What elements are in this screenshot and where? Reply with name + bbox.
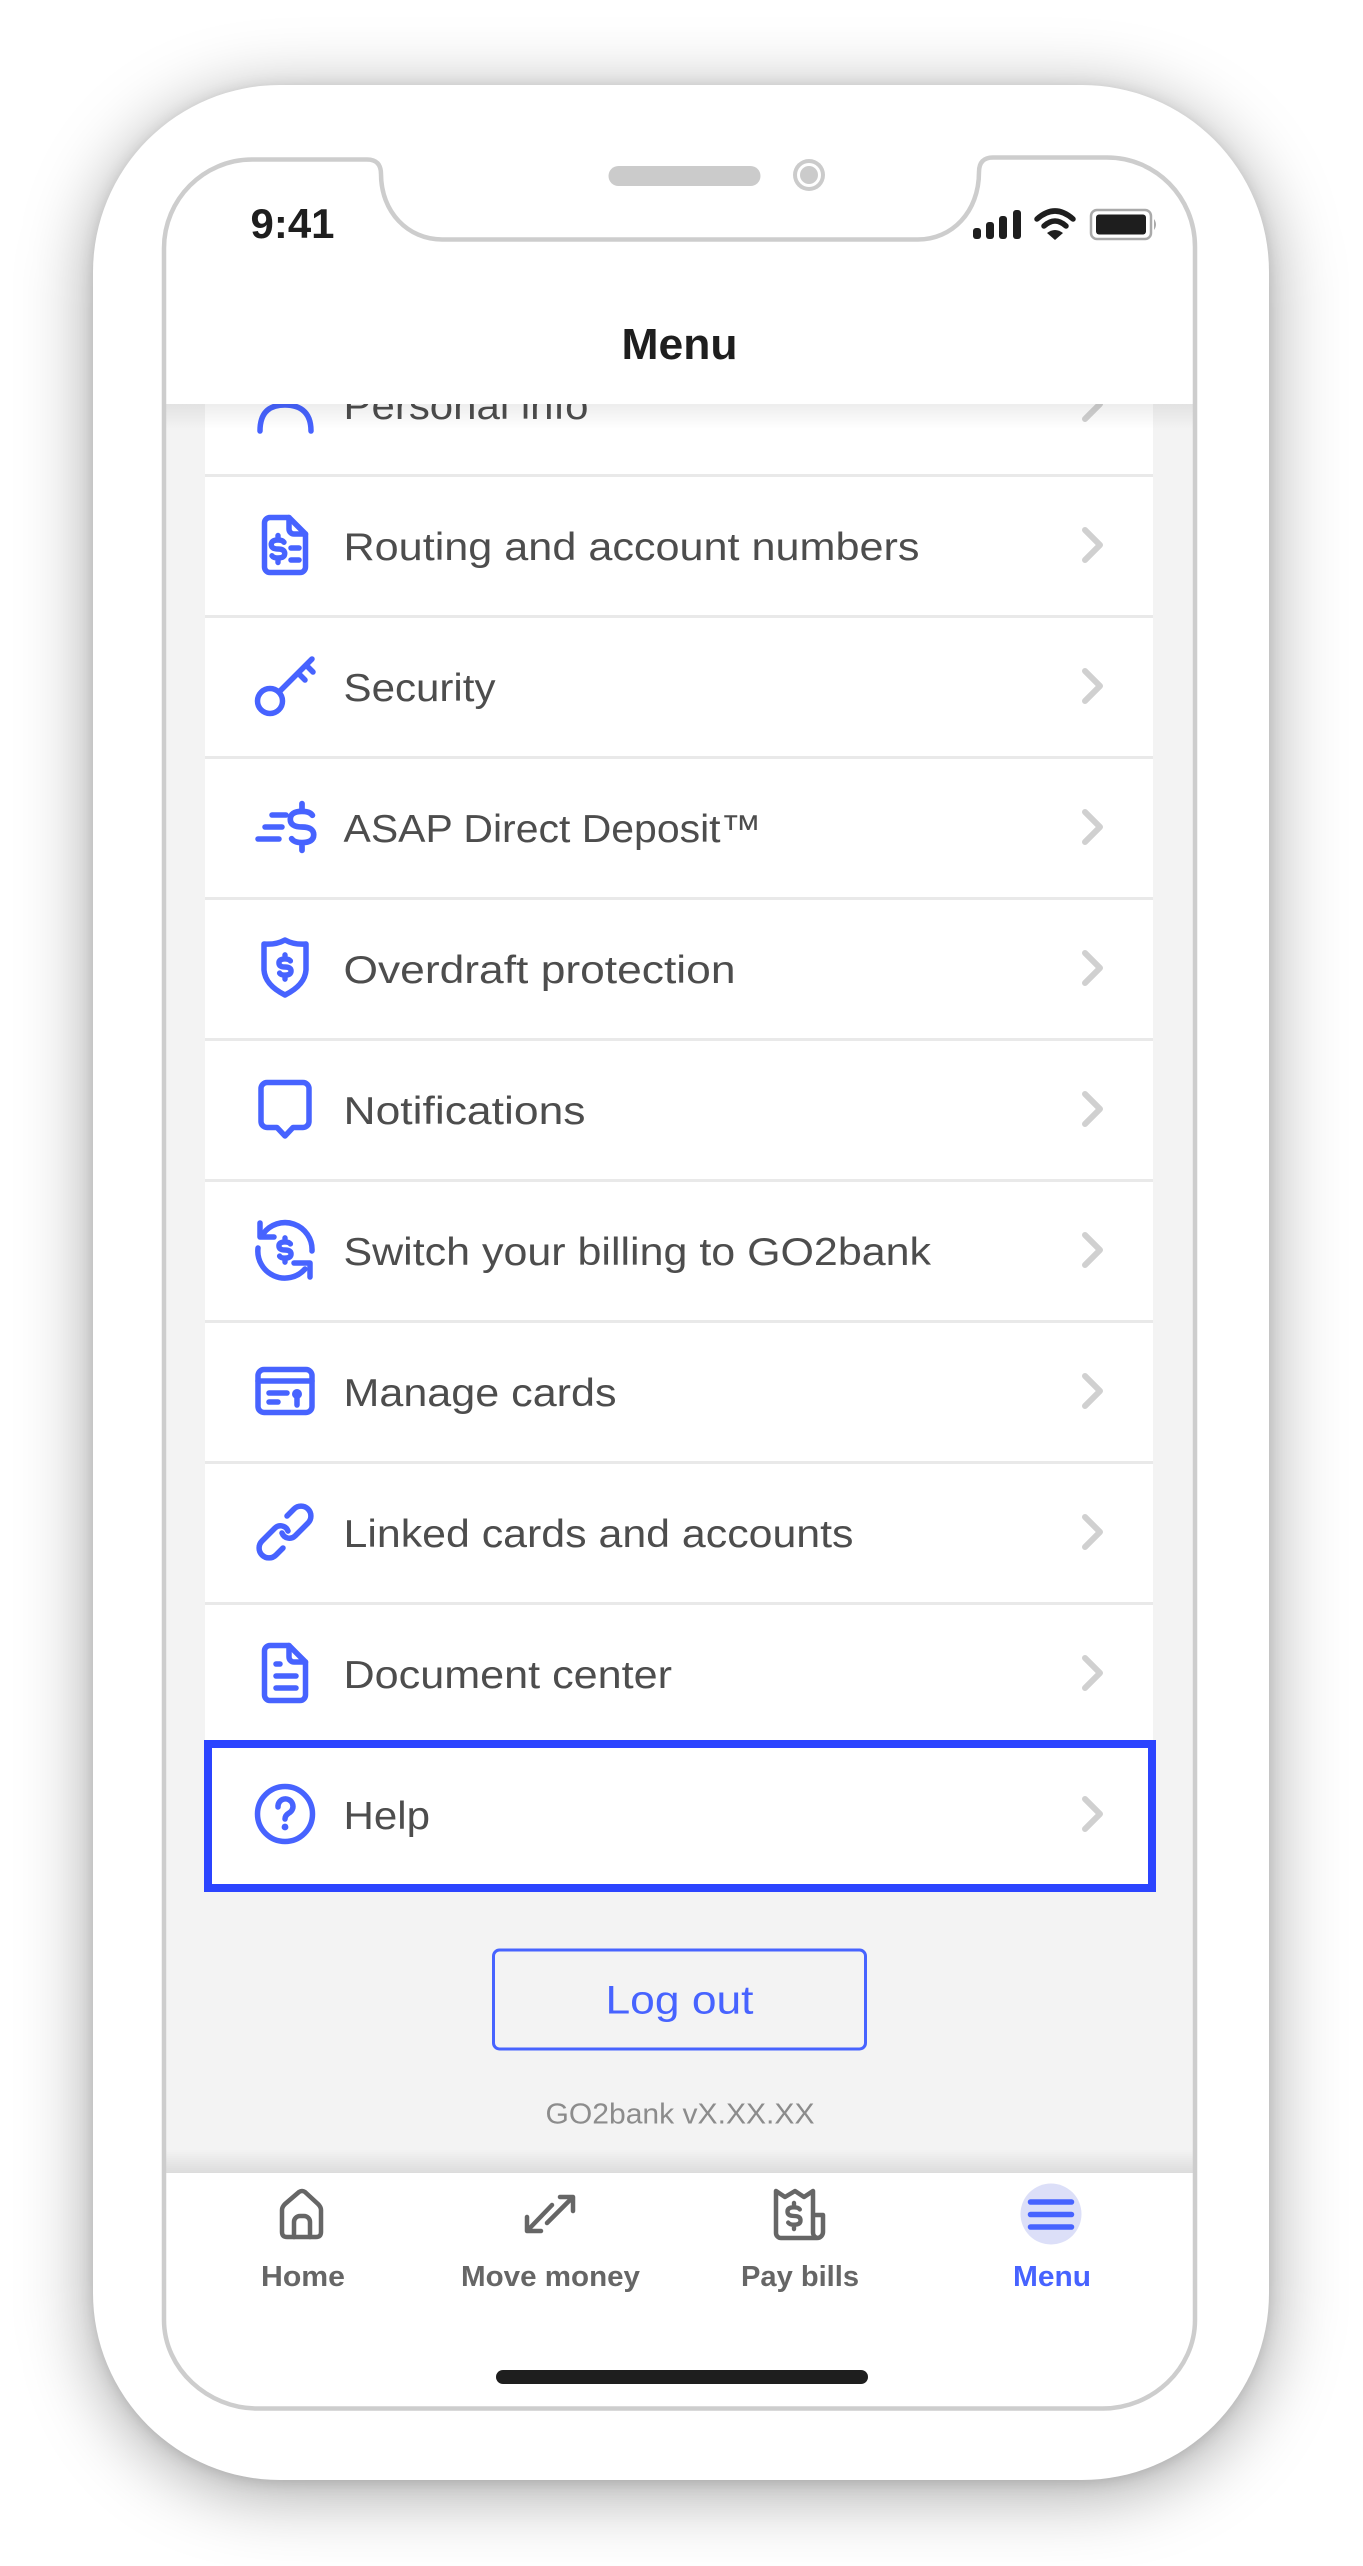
status bar: wifi: [1037, 211, 1073, 240]
tab: move money: [461, 2197, 640, 2293]
row: notifications: [261, 1082, 1100, 1136]
row: help highlighted: [208, 1744, 1152, 1888]
header: [160, 150, 1205, 429]
version label: GO2bank vX.XX.XX: [546, 2098, 814, 2130]
row: manage cards: Manage cards: [344, 1372, 616, 1415]
row: document center: Document center: [344, 1654, 672, 1697]
row: routing and account numbers: [264, 518, 1100, 572]
row: linked cards and accounts: Linked cards and accounts: [344, 1513, 854, 1556]
tab: home: [261, 2191, 345, 2293]
log out button: Log out: [606, 1978, 754, 2022]
speaker: [608, 166, 760, 186]
tab: pay bills: [741, 2191, 859, 2293]
row: switch your billing: [258, 1223, 1100, 1278]
home indicator: [496, 2370, 868, 2384]
row: help highlighted: Help: [344, 1795, 430, 1838]
row: security: Security: [344, 667, 496, 710]
tab: menu active: [1013, 2184, 1091, 2293]
tab: home: Home: [261, 2261, 345, 2293]
panel: menu list: [205, 300, 1153, 1888]
title: Menu: Menu: [622, 320, 738, 369]
row: linked cards and accounts: [259, 1506, 1100, 1558]
row: ASAP direct deposit: ASAP Direct Deposit™: [344, 808, 762, 851]
tab bar: [160, 2150, 1205, 2413]
tab: menu active: Menu: [1013, 2261, 1091, 2293]
row: personal info: [257, 404, 1103, 434]
screen outline with notch: [164, 158, 1195, 2408]
row: security: [258, 659, 1100, 714]
row: notifications: Notifications: [344, 1090, 586, 1133]
row: document center: [264, 1646, 1100, 1700]
tab: pay bills: Pay bills: [741, 2261, 859, 2293]
log out button: [494, 1950, 866, 2049]
row: overdraft protection: Overdraft protection: [344, 949, 736, 992]
status bar: time: 9:41: [250, 200, 334, 247]
row: switch your billing: Switch your billing to GO2bank: [344, 1231, 932, 1274]
row: personal info: Personal info: [344, 385, 588, 428]
row: overdraft protection: [264, 940, 1100, 995]
row: ASAP direct deposit: [258, 804, 1100, 851]
phone screen: [166, 329, 1193, 2384]
row: routing and account numbers: Routing and account numbers: [344, 526, 920, 569]
tab: move money: Move money: [461, 2261, 640, 2293]
status bar: battery: [1091, 210, 1156, 239]
status bar: signal: [973, 210, 1021, 239]
row: manage cards: [258, 1370, 1100, 1415]
camera: [793, 159, 825, 191]
